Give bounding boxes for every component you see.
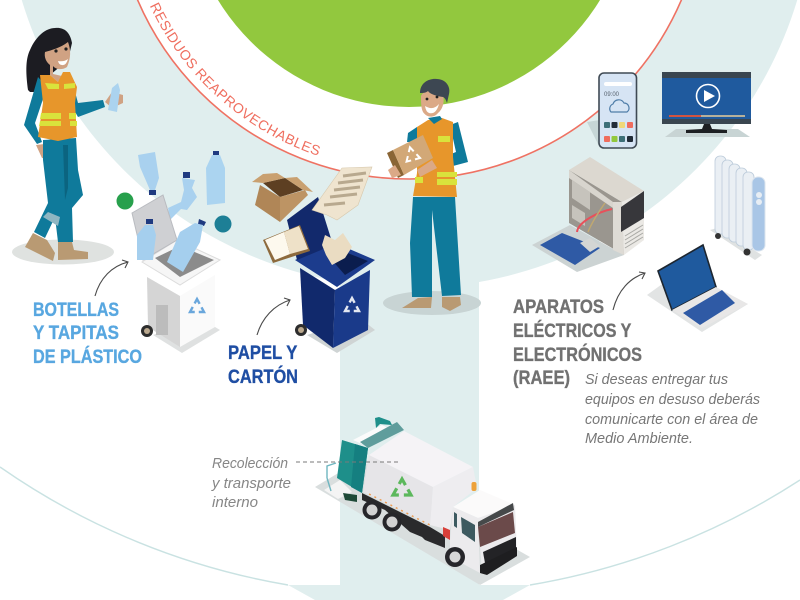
man worker holding box <box>383 79 481 315</box>
arrow to plastics bin <box>95 260 128 296</box>
blue recycling bin <box>287 197 375 353</box>
heading: paper and cardboard: CARTÓN <box>228 366 298 388</box>
woman worker holding bottle <box>12 28 123 264</box>
open computer tower with motherboard <box>532 157 644 272</box>
note: delivering unused equipment: comunicarte con el área de <box>585 411 758 428</box>
arrow to electronics <box>613 272 645 310</box>
heading: electrical and electronic equipment: ELECTRÓNICOS <box>513 344 642 366</box>
green circle <box>185 0 633 107</box>
smartphone: 09:00 <box>604 92 620 98</box>
label: collection and internal transport: y transporte <box>211 475 291 492</box>
oil radiator heater <box>710 156 765 260</box>
television monitor <box>662 72 751 137</box>
heading: plastic bottles and caps: Y TAPITAS <box>33 323 119 344</box>
label: collection and internal transport: Recolección <box>212 455 288 472</box>
cardboard box, newspaper, book and crumpled paper <box>252 167 372 265</box>
curved label: residuos reaprovechables: RESIDUOS REAPROVECHABLES <box>150 2 320 155</box>
dashed leader line <box>296 461 398 463</box>
heading: electrical and electronic equipment: (RAEE) <box>513 368 570 389</box>
heading: electrical and electronic equipment: APARATOS <box>513 297 604 318</box>
laptop <box>647 245 748 332</box>
bottles falling into white bin <box>137 219 206 272</box>
heading: paper and cardboard: PAPEL Y <box>228 343 298 364</box>
heading: plastic bottles and caps: BOTELLAS <box>33 300 119 321</box>
heading: plastic bottles and caps: DE PLÁSTICO <box>33 346 142 368</box>
note: delivering unused equipment: Si deseas entregar tus <box>585 371 728 388</box>
label: collection and internal transport: interno <box>212 494 258 511</box>
plastic bottles and caps <box>116 151 232 232</box>
white recycling bin <box>132 195 220 353</box>
heading: electrical and electronic equipment: ELÉCTRICOS Y <box>513 320 632 342</box>
note: delivering unused equipment: equipos en desuso deberás <box>585 391 760 408</box>
collection truck <box>315 417 530 585</box>
smartphone <box>587 73 636 148</box>
note: delivering unused equipment: Medio Ambiente. <box>585 430 693 447</box>
arrow to paper bin <box>257 298 290 335</box>
